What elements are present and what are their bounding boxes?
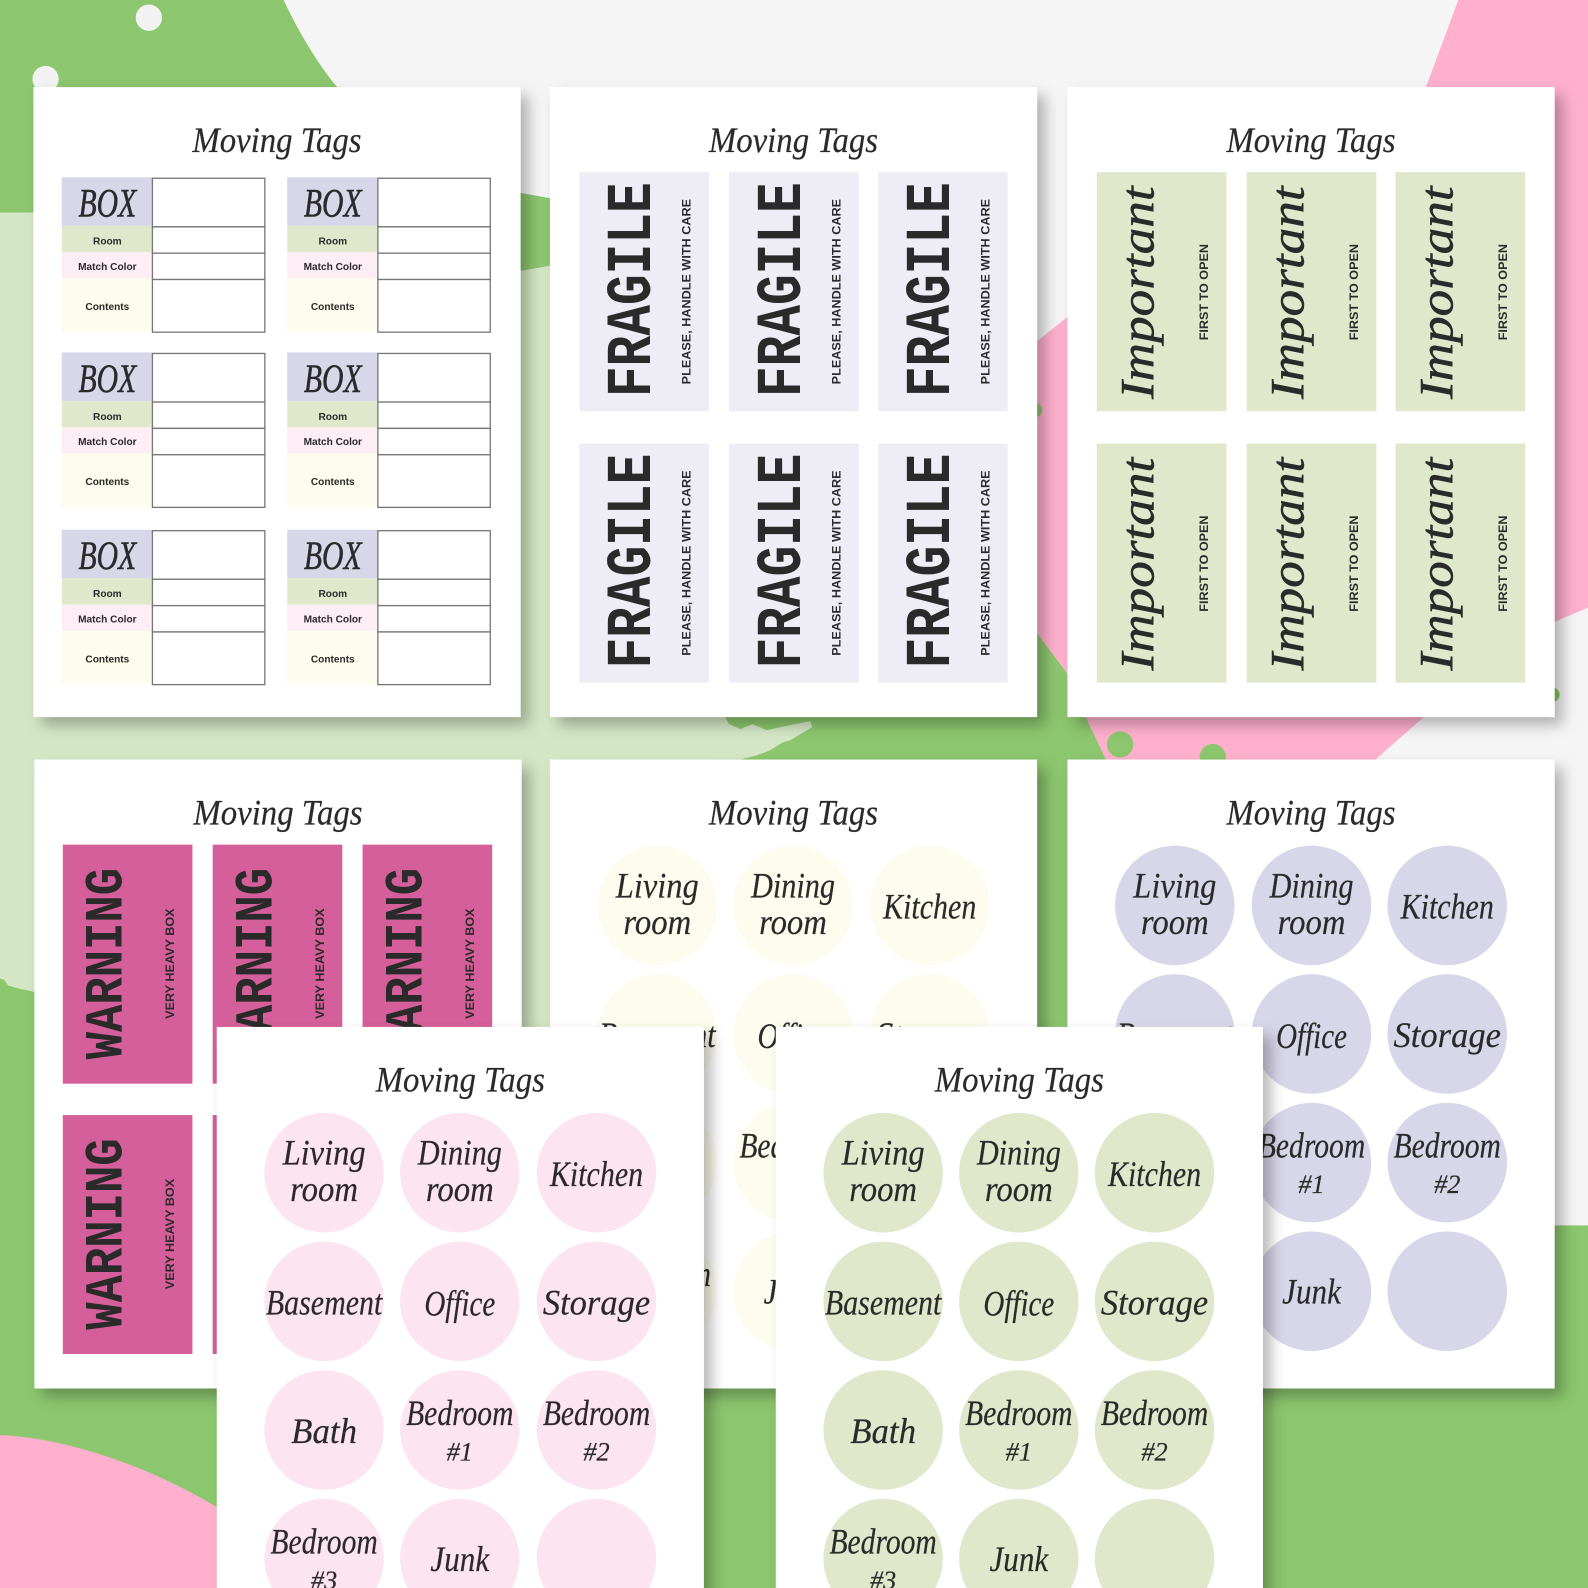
box label 5: Contents xyxy=(85,654,130,665)
circle: junk: Junk xyxy=(430,1539,490,1579)
warning tag 2: VERY HEAVY BOX xyxy=(313,908,327,1019)
warning tag 4: VERY HEAVY BOX xyxy=(163,1179,177,1289)
heading: Moving Tags xyxy=(191,120,362,160)
circle: bath xyxy=(1115,1103,1235,1222)
box label 4: BOX xyxy=(304,356,363,401)
box label 3 xyxy=(62,352,265,507)
circle: storage xyxy=(1387,974,1507,1094)
box label 2: Match Color xyxy=(304,262,362,273)
box label 1: Contents xyxy=(85,302,130,313)
box label 3: Contents xyxy=(85,477,130,488)
important tag 5: Important xyxy=(1262,456,1314,672)
pink blob bottom left xyxy=(0,1435,217,1588)
circle: blank xyxy=(1387,1232,1507,1351)
box label 2 xyxy=(287,177,490,332)
box label 3: Match Color xyxy=(78,437,137,448)
circle: living room: room xyxy=(849,1169,917,1209)
circle: bedroom 1 xyxy=(959,1370,1079,1490)
circle: dining room: Dining xyxy=(1269,865,1354,905)
green dot on pink xyxy=(1107,731,1133,758)
box label 4 xyxy=(287,352,490,507)
important tag 1: FIRST TO OPEN xyxy=(1197,244,1211,340)
circle: bedroom 3: #3 xyxy=(644,1299,670,1328)
warning tag 3: WARNING xyxy=(377,868,438,1059)
circle: storage xyxy=(1095,1242,1214,1361)
circle: dining room: Dining xyxy=(750,865,835,905)
circle: bedroom 1: #1 xyxy=(1006,1437,1032,1466)
panel: box label sheet xyxy=(33,87,521,717)
warning tag 2: WARNING xyxy=(227,868,288,1059)
circle: basement xyxy=(598,974,717,1094)
circle: bedroom 2 xyxy=(870,1103,989,1222)
circle: bedroom 3: Bedroom xyxy=(604,1254,711,1294)
circle: bath xyxy=(823,1370,943,1490)
circle: dining room xyxy=(733,846,853,965)
circle: living room: room xyxy=(1141,902,1209,942)
important tag 5: FIRST TO OPEN xyxy=(1347,515,1361,612)
circle: kitchen: Kitchen xyxy=(882,887,976,927)
important tag 2: Important xyxy=(1262,184,1314,400)
important tag 2: FIRST TO OPEN xyxy=(1347,244,1361,340)
box label 1: Room xyxy=(93,237,122,248)
pink blob top right xyxy=(1037,0,1588,760)
circle: bedroom 2: Bedroom xyxy=(876,1126,983,1166)
circle: bath: Bath xyxy=(850,1411,916,1451)
box label 5 xyxy=(62,530,265,685)
heading: Moving Tags xyxy=(193,792,363,832)
box label 4: Room xyxy=(318,412,347,423)
warning tag 4 xyxy=(63,1115,192,1354)
panel: cream room circles sheet xyxy=(550,760,1037,1388)
warning tag 4: WARNING xyxy=(78,1138,139,1330)
circle: bedroom 1: #1 xyxy=(780,1170,806,1199)
circle: storage: Storage xyxy=(543,1283,650,1323)
circle: living room: Living xyxy=(615,865,699,905)
circle: blank xyxy=(1095,1499,1214,1588)
circle: bedroom 2 xyxy=(537,1370,656,1490)
circle: storage xyxy=(537,1242,656,1361)
fragile tag 6 xyxy=(878,444,1008,683)
circle: junk: Junk xyxy=(764,1271,823,1311)
circle: dining room xyxy=(1252,846,1371,965)
green dot right xyxy=(1545,688,1560,702)
circle: bedroom 2: #2 xyxy=(1434,1170,1460,1199)
warning tag 1: VERY HEAVY BOX xyxy=(163,908,177,1019)
box label 4: Match Color xyxy=(304,437,362,448)
circle: bath: Bath xyxy=(624,1144,690,1184)
circle: bedroom 3: Bedroom xyxy=(829,1522,937,1562)
circle: bath: Bath xyxy=(1142,1144,1208,1184)
circle: bedroom 1 xyxy=(400,1370,520,1490)
panel: pink room circles sheet xyxy=(217,1027,704,1588)
circle: bedroom 3 xyxy=(1115,1232,1235,1351)
green dot on pink lower xyxy=(1200,744,1226,770)
panel: warning tags sheet xyxy=(34,760,522,1388)
important tag 4: Important xyxy=(1113,456,1165,672)
circle: junk xyxy=(959,1499,1079,1588)
circle: office: Office xyxy=(983,1284,1054,1324)
circle: kitchen: Kitchen xyxy=(549,1154,643,1194)
light green area with brush edge xyxy=(0,213,812,1033)
warning tag 3 xyxy=(363,845,492,1084)
circle: basement: Basement xyxy=(825,1283,942,1323)
circle: living room xyxy=(598,846,717,965)
circle: bedroom 3: Bedroom xyxy=(270,1522,378,1562)
circle: kitchen xyxy=(537,1113,656,1233)
box label 3: BOX xyxy=(78,356,138,401)
circle: bedroom 2: Bedroom xyxy=(543,1393,650,1433)
box label 6: Contents xyxy=(311,654,355,665)
circle: bedroom 2: Bedroom xyxy=(1394,1126,1501,1166)
panel: purple room circles sheet xyxy=(1067,760,1555,1388)
circle: dining room: room xyxy=(426,1169,494,1209)
fragile tag 4: PLEASE, HANDLE WITH CARE xyxy=(680,470,694,656)
heading: Moving Tags xyxy=(708,120,878,160)
circle: office xyxy=(959,1242,1079,1361)
circle: bedroom 1: Bedroom xyxy=(406,1393,513,1433)
box label 2: BOX xyxy=(304,181,363,226)
warning tag 5 xyxy=(213,1115,342,1354)
circle: living room xyxy=(823,1113,943,1233)
important tag 2 xyxy=(1247,172,1376,411)
circle: bedroom 1: #1 xyxy=(1298,1170,1325,1199)
circle: kitchen: Kitchen xyxy=(1400,887,1494,927)
circle: bedroom 1: Bedroom xyxy=(965,1393,1073,1433)
circle: basement: Basement xyxy=(599,1015,716,1055)
circle: storage: Storage xyxy=(1394,1015,1501,1055)
panel: fragile tags sheet xyxy=(550,87,1037,717)
fragile tag 6: PLEASE, HANDLE WITH CARE xyxy=(978,470,992,656)
important tag 6 xyxy=(1396,444,1525,683)
circle: junk xyxy=(1252,1232,1371,1351)
warning tag 2 xyxy=(213,845,342,1084)
circle: bedroom 2: #2 xyxy=(583,1437,610,1466)
circle: blank xyxy=(870,1232,989,1351)
circle: office: Office xyxy=(758,1016,828,1056)
important tag 3: FIRST TO OPEN xyxy=(1496,244,1510,340)
circle: dining room: room xyxy=(1278,902,1345,942)
heading: Moving Tags xyxy=(1226,120,1396,160)
circle: living room: room xyxy=(623,902,691,942)
fragile tag 2: PLEASE, HANDLE WITH CARE xyxy=(830,199,844,384)
circle: dining room: Dining xyxy=(976,1133,1061,1173)
circle: bedroom 3 xyxy=(823,1499,943,1588)
circle: living room: Living xyxy=(1132,865,1216,905)
circle: junk: Junk xyxy=(989,1539,1049,1579)
important tag 6: Important xyxy=(1411,456,1463,672)
fragile tag 3: FRAGILE xyxy=(897,182,969,397)
fragile tag 4 xyxy=(579,444,709,683)
heading: Moving Tags xyxy=(1226,792,1396,832)
important tag 4: FIRST TO OPEN xyxy=(1197,515,1211,612)
box label 1: BOX xyxy=(78,181,138,226)
circle: office xyxy=(1252,974,1371,1094)
panel: important tags sheet xyxy=(1067,87,1555,717)
important tag 6: FIRST TO OPEN xyxy=(1496,515,1510,612)
circle: junk: Junk xyxy=(1282,1271,1342,1311)
green dot middle xyxy=(1028,403,1042,417)
circle: bedroom 1: Bedroom xyxy=(739,1126,847,1166)
important tag 1: Important xyxy=(1113,184,1165,400)
circle: dining room: room xyxy=(759,902,827,942)
circle: office xyxy=(733,974,853,1094)
circle: blank xyxy=(537,1499,656,1588)
circle: basement xyxy=(1115,974,1235,1094)
fragile tag 5 xyxy=(729,444,859,683)
circle: living room: room xyxy=(290,1169,358,1209)
box label 5: Room xyxy=(93,589,122,600)
warning tag 3: VERY HEAVY BOX xyxy=(463,908,477,1019)
important tag 5 xyxy=(1247,444,1376,683)
circle: office xyxy=(400,1242,520,1361)
circle: living room xyxy=(1115,846,1235,965)
box label 2: Contents xyxy=(311,302,355,313)
fragile tag 2 xyxy=(729,172,859,411)
fragile tag 3: PLEASE, HANDLE WITH CARE xyxy=(978,199,992,384)
circle: bedroom 1: Bedroom xyxy=(1258,1126,1365,1166)
circle: storage xyxy=(870,974,989,1094)
box label 4: Contents xyxy=(311,477,355,488)
box label 2: Room xyxy=(318,237,347,248)
box label 1 xyxy=(62,177,265,332)
circle: kitchen xyxy=(1095,1113,1214,1233)
circle: bedroom 3: Bedroom xyxy=(1121,1254,1228,1294)
circle: dining room xyxy=(959,1113,1079,1233)
box label 5: BOX xyxy=(78,533,138,578)
white dot top xyxy=(136,5,162,31)
circle: bedroom 3 xyxy=(264,1499,384,1588)
circle: basement: Basement xyxy=(1117,1015,1234,1055)
fragile tag 6: FRAGILE xyxy=(897,454,969,668)
warning tag 1: WARNING xyxy=(78,868,139,1059)
circle: dining room xyxy=(400,1113,520,1233)
important tag 3 xyxy=(1396,172,1525,411)
circle: bedroom 2 xyxy=(1095,1370,1214,1490)
circle: bath: Bath xyxy=(291,1411,357,1451)
box label 6: Room xyxy=(318,589,347,600)
fragile tag 1 xyxy=(579,172,709,411)
circle: living room: Living xyxy=(282,1133,366,1173)
fragile tag 4: FRAGILE xyxy=(598,454,670,668)
circle: bedroom 3 xyxy=(598,1232,717,1351)
green strip behind first cards xyxy=(506,190,552,273)
circle: bath xyxy=(598,1103,717,1222)
circle: bedroom 2: Bedroom xyxy=(1101,1393,1208,1433)
green blob top left xyxy=(0,0,456,213)
circle: bedroom 1 xyxy=(1252,1103,1371,1222)
fragile tag 1: FRAGILE xyxy=(598,182,670,397)
important tag 3: Important xyxy=(1411,184,1463,400)
circle: dining room: room xyxy=(985,1169,1053,1209)
fragile tag 1: PLEASE, HANDLE WITH CARE xyxy=(680,199,694,384)
heading: Moving Tags xyxy=(708,792,878,832)
circle: bedroom 2: #2 xyxy=(917,1170,943,1199)
heading: Moving Tags xyxy=(375,1060,545,1100)
fragile tag 2: FRAGILE xyxy=(748,182,820,397)
circle: kitchen xyxy=(870,846,989,965)
circle: office: Office xyxy=(424,1284,495,1324)
important tag 4 xyxy=(1097,444,1226,683)
green lower area xyxy=(0,628,1588,1588)
circle: storage: Storage xyxy=(876,1015,983,1055)
box label 6 xyxy=(287,530,490,685)
circle: junk xyxy=(400,1499,520,1588)
circle: kitchen: Kitchen xyxy=(1107,1154,1201,1194)
circle: bedroom 2: #2 xyxy=(1141,1437,1168,1466)
box label 6: Match Color xyxy=(304,614,362,625)
box label 5: Match Color xyxy=(78,614,137,625)
white dot left xyxy=(32,66,59,92)
circle: living room: Living xyxy=(841,1133,925,1173)
box label 1: Match Color xyxy=(78,262,137,273)
circle: bath xyxy=(264,1370,384,1490)
circle: kitchen xyxy=(1387,846,1507,965)
circle: basement xyxy=(264,1242,384,1361)
circle: bedroom 1: #1 xyxy=(447,1437,473,1466)
box label 6: BOX xyxy=(304,533,363,578)
important tag 1 xyxy=(1097,172,1226,411)
circle: bedroom 2 xyxy=(1387,1103,1507,1222)
fragile tag 3 xyxy=(878,172,1008,411)
circle: basement: Basement xyxy=(266,1283,383,1323)
circle: office: Office xyxy=(1276,1016,1347,1056)
circle: dining room: Dining xyxy=(417,1133,502,1173)
heading: Moving Tags xyxy=(934,1060,1104,1100)
circle: bedroom 1 xyxy=(733,1103,853,1222)
fragile tag 5: PLEASE, HANDLE WITH CARE xyxy=(830,470,844,656)
circle: storage: Storage xyxy=(1101,1283,1208,1323)
circle: living room xyxy=(264,1113,384,1233)
circle: junk xyxy=(733,1232,853,1351)
fragile tag 5: FRAGILE xyxy=(748,454,820,668)
circle: basement xyxy=(823,1242,943,1361)
panel: green room circles sheet xyxy=(776,1027,1263,1588)
box label 3: Room xyxy=(93,412,122,423)
circle: bedroom 3: #3 xyxy=(1162,1299,1188,1328)
warning tag 1 xyxy=(63,845,192,1084)
